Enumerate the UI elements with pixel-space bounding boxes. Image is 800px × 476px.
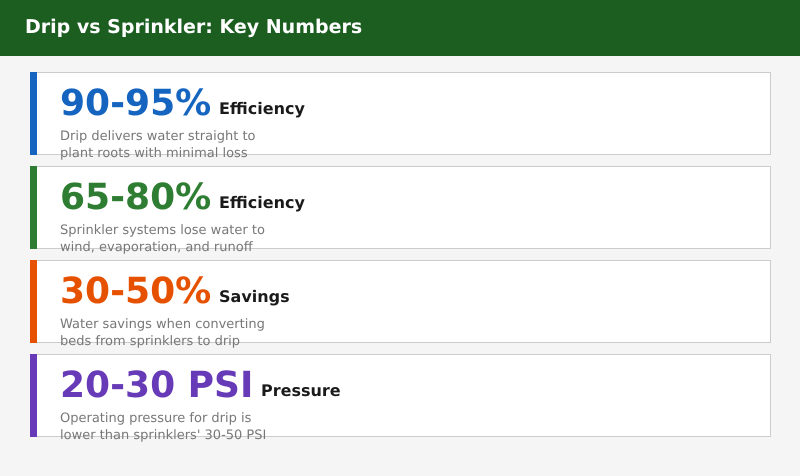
description: water savings: beds from sprinklers to drip [60,334,240,349]
description: operating pressure: lower than sprinklers' 30-50 PSI [60,428,266,443]
stat: 20-30 PSI: 20-30 PSI [60,365,253,406]
description: sprinkler efficiency: wind, evaporation, and runoff [60,240,254,255]
description: water savings: Water savings when converting [60,317,265,332]
stat: 30-50%: 30-50% [60,271,211,312]
panel: operating pressure [30,354,770,443]
label: efficiency: Efficiency [219,193,305,212]
panel: drip efficiency [30,72,770,161]
label: pressure: Pressure [261,381,341,400]
description: operating pressure: Operating pressure for drip is [60,411,251,426]
stat: 90-95%: 90-95% [60,83,211,124]
description: drip efficiency: plant roots with minimal loss [60,146,248,161]
description: sprinkler efficiency: Sprinkler systems lose water to [60,223,265,238]
panel: sprinkler efficiency [30,166,770,255]
description: drip efficiency: Drip delivers water straight to [60,129,256,144]
label: efficiency: Efficiency [219,99,305,118]
panel: water savings [30,260,770,349]
label: savings: Savings [219,287,290,306]
header banner [0,0,800,56]
stat: 65-80%: 65-80% [60,177,211,218]
title: Drip vs Sprinkler: Key Numbers [25,16,362,38]
